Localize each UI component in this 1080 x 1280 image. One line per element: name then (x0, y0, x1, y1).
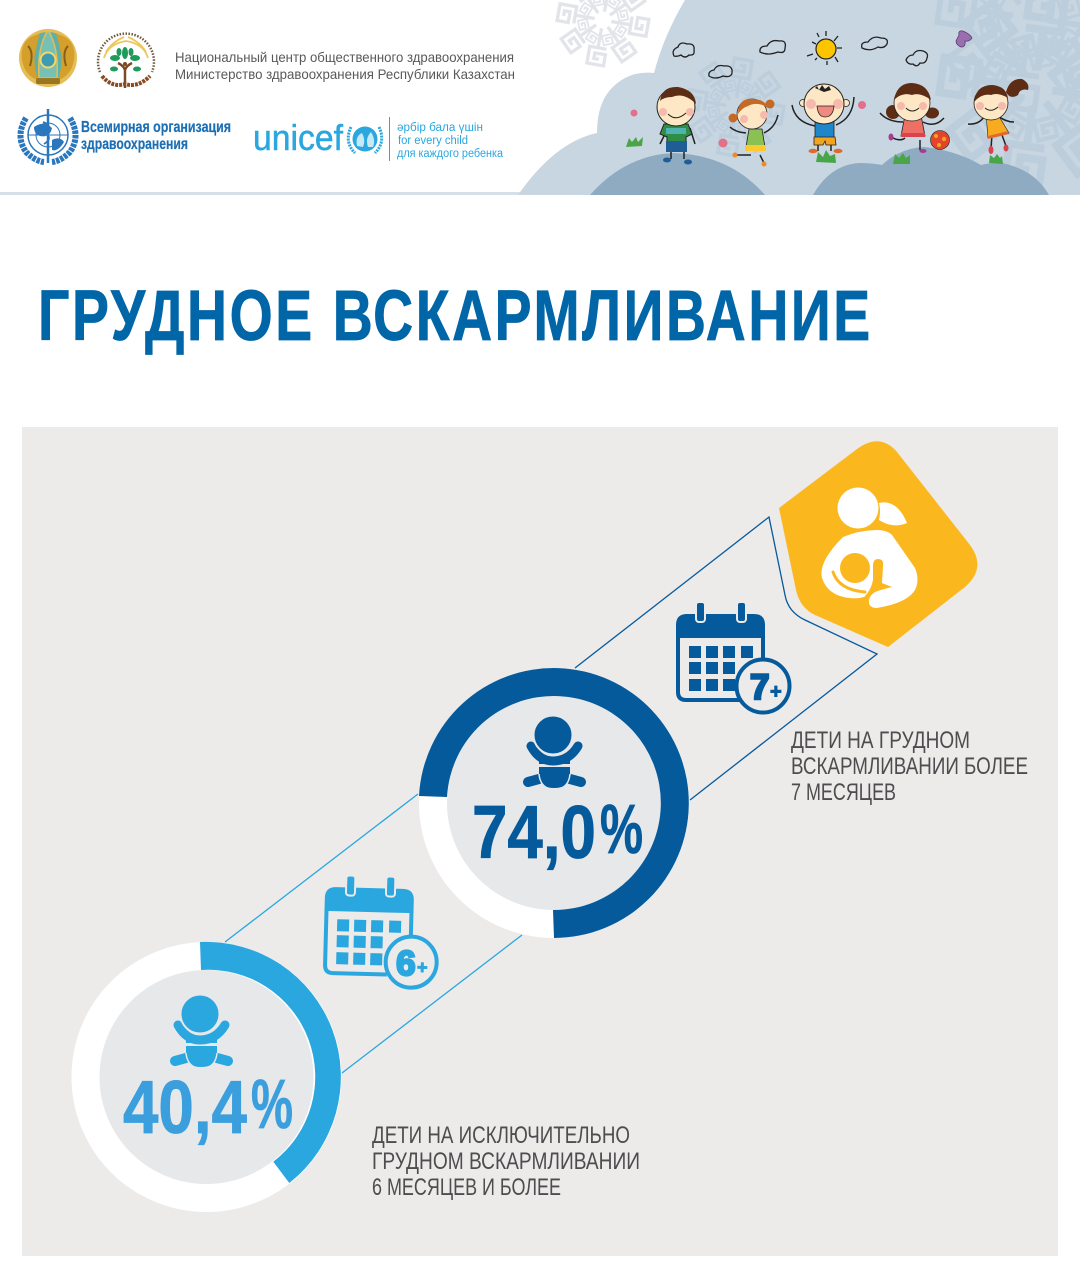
value: 40,4 (123, 1065, 247, 1149)
connector: light blue band (225, 794, 522, 1073)
label: 6 months: 6 МЕСЯЦЕВ И БОЛЕЕ (372, 1174, 561, 1201)
value: % (251, 1065, 293, 1143)
sun (816, 39, 836, 59)
value: 74,0 (472, 790, 596, 874)
ball (930, 130, 950, 150)
organisation names: Министерство здравоохранения Республики Казахстан (175, 66, 515, 82)
hills (590, 147, 1049, 195)
WHO name: Всемирная организация (81, 119, 231, 136)
connector: dark blue band (575, 517, 877, 800)
butterfly (956, 31, 972, 47)
organisation names (175, 49, 515, 82)
ornament: top white area (551, 0, 655, 72)
illustration: boy in green (657, 87, 696, 164)
icon: mother and baby badge (779, 441, 977, 647)
donut: 74,0% (419, 668, 689, 938)
label: 6 months: ДЕТИ НА ИСКЛЮЧИТЕЛЬНО (372, 1122, 630, 1149)
logo: UNICEF: әрбір бала үшін (397, 122, 483, 134)
icon: calendar 6+: + (417, 957, 428, 978)
illustration: sky (626, 31, 1003, 164)
logo: WHO (20, 109, 76, 163)
donut: 40,4% (86, 942, 341, 1198)
illustration: girl with ponytail (968, 79, 1028, 154)
logo: UNICEF: unicef (253, 117, 344, 158)
title: ГРУДНОЕ ВСКАРМЛИВАНИЕ (38, 276, 870, 356)
label: 7 months: 7 МЕСЯЦЕВ (791, 779, 896, 806)
icon: calendar 7+: 7 (750, 668, 769, 707)
value: % (600, 790, 643, 868)
icon: baby (528, 716, 581, 789)
logo: UNICEF: для каждого ребенка (397, 148, 504, 160)
panel: breastfeeding statistics (22, 427, 1058, 1256)
illustration: girl in light green (728, 99, 778, 166)
logo: national healthcare emblem (98, 34, 154, 88)
label: 6 months: ГРУДНОМ ВСКАРМЛИВАНИИ (372, 1148, 640, 1175)
logo: emblem of Kazakhstan (19, 29, 77, 87)
logo: UNICEF (253, 117, 504, 161)
header band (0, 0, 1080, 195)
WHO name (81, 119, 231, 153)
small flowers and grass (630, 110, 638, 116)
icon: calendar 6+ (323, 875, 439, 988)
label: 7 months: ДЕТИ НА ГРУДНОМ (791, 727, 970, 754)
icon: calendar 6+: 6 (396, 944, 416, 983)
illustration: boy in blue (792, 84, 854, 153)
WHO name: здравоохранения (81, 136, 188, 153)
label: 7 months (791, 727, 1028, 806)
illustration: girl with ball (880, 83, 950, 153)
background cloud shape (518, 0, 1080, 195)
logo: UNICEF: for every child (398, 135, 468, 147)
icon: calendar 7+ (676, 602, 790, 712)
label: 6 months (372, 1122, 640, 1201)
background ornaments (679, 0, 1080, 194)
icon: baby (175, 994, 228, 1068)
icon: calendar 7+: + (770, 681, 782, 703)
organisation names: Национальный центр общественного здравоохранения (175, 49, 514, 65)
